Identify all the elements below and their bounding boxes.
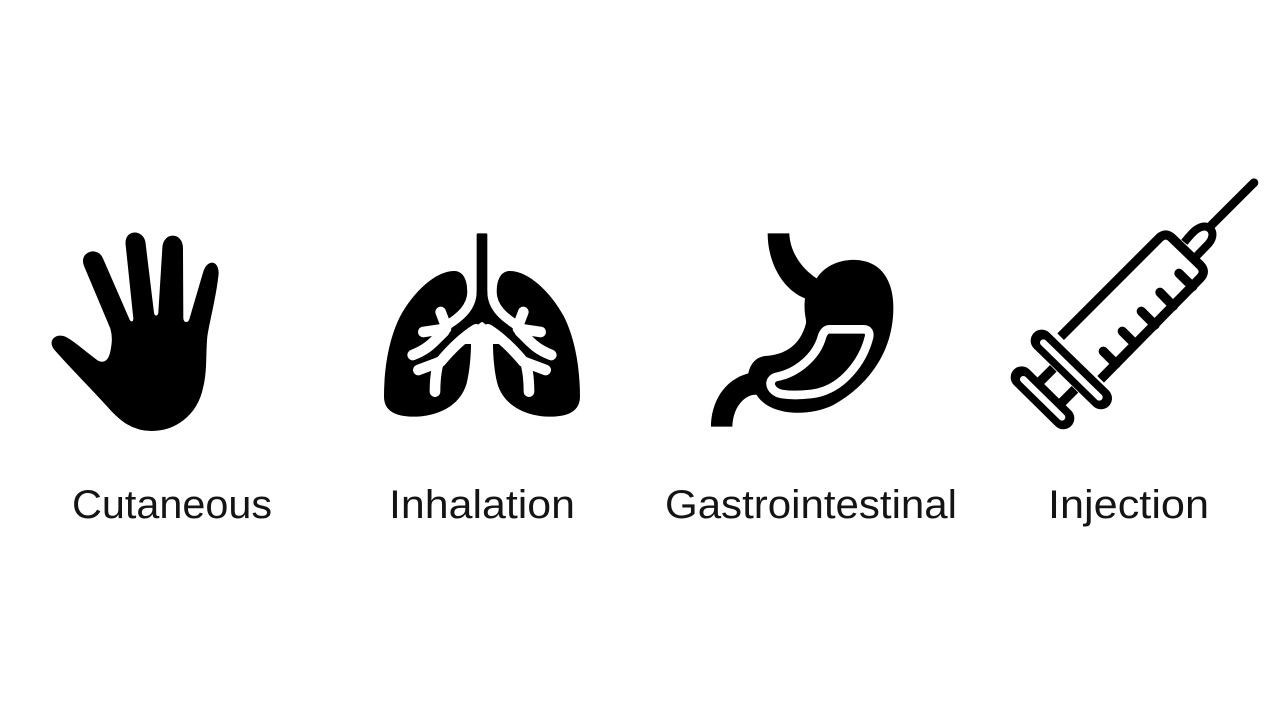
trachea <box>460 233 504 325</box>
label: Inhalation: Inhalation <box>389 483 575 527</box>
left lung <box>384 271 482 417</box>
icon: hand <box>52 233 218 430</box>
label: Cutaneous: Cutaneous <box>72 483 272 527</box>
right lung <box>482 271 580 417</box>
icon: lungs <box>384 233 580 417</box>
icon: syringe <box>1022 183 1254 418</box>
icon: stomach <box>711 233 893 427</box>
label: Injection: Injection <box>1048 483 1209 527</box>
label: Gastrointestinal: Gastrointestinal <box>665 483 957 527</box>
